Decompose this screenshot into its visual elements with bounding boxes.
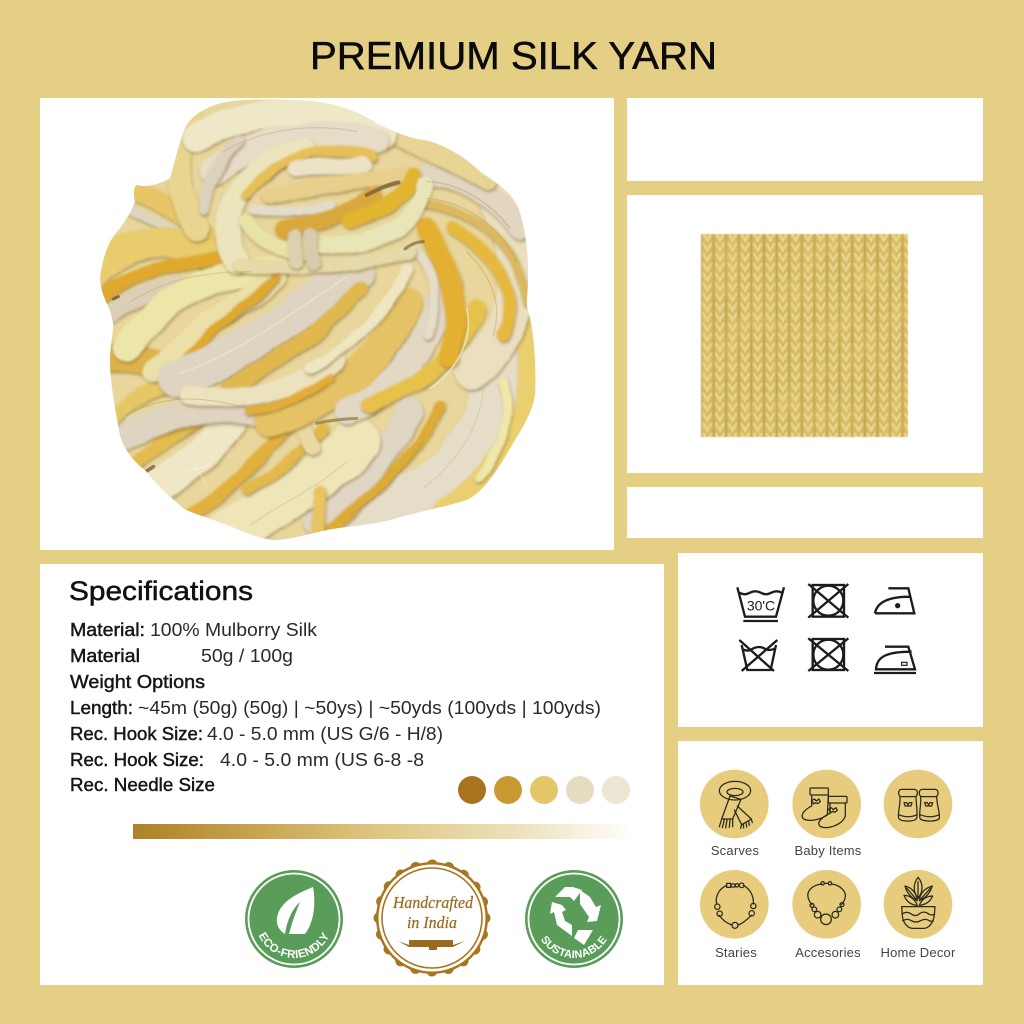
panel: yarn photo: [40, 95, 614, 550]
spec line: hook size second: [70, 750, 424, 770]
badge: sustainable: SUSTAINABLE: [542, 936, 607, 958]
icon: potted plant: [884, 870, 952, 939]
spec line: needle size: Rec. Needle Size: [70, 775, 215, 795]
badge: sustainable: [525, 870, 623, 968]
badge: handcrafted in india: Handcrafted: [392, 893, 473, 912]
icon: do not wash: [739, 640, 777, 671]
spec line: length: Length:: [70, 698, 133, 718]
badge: eco-friendly: [245, 870, 343, 968]
spec line: material weight: 50g / 100g: [201, 646, 293, 666]
panel: specifications: [40, 564, 704, 985]
image: knitted swatch: [701, 234, 908, 437]
icon: recycle arrows: [550, 887, 601, 945]
spec line: material weight: [70, 646, 293, 666]
panel: care symbols: [678, 553, 983, 727]
icon: baby shoes: [884, 770, 952, 838]
panel: knit swatch: [627, 195, 983, 473]
badge: handcrafted in india: in India: [407, 913, 457, 932]
icon: scarf: [700, 770, 769, 838]
icon: beaded necklace: [792, 870, 861, 939]
icon: necklace: [700, 870, 769, 939]
icon: leaf: [277, 887, 314, 934]
label: baby items: Baby Items: [794, 843, 862, 858]
gradient bar: [133, 824, 637, 839]
icon: baby booties: [792, 770, 861, 838]
label: scarves: Scarves: [711, 843, 759, 858]
badge: eco-friendly: ECO-FRIENDLY: [258, 932, 328, 958]
title: PREMIUM SILK YARN: [310, 35, 717, 78]
label: staries: Staries: [715, 945, 757, 960]
label: accesories: Accesories: [795, 945, 861, 960]
spec line: hook size: Rec. Hook Size:: [70, 724, 203, 744]
colour swatches: [458, 776, 630, 804]
badge: handcrafted in india: [376, 862, 488, 974]
spec line: material: Material:: [70, 620, 145, 640]
spec line: hook size second: Rec. Hook Size:: [70, 750, 204, 770]
image: silk yarn skein: [90, 95, 557, 548]
icon: do not tumble dry: [808, 584, 848, 618]
spec line: material weight: Material: [70, 646, 140, 666]
spec line: material: [70, 620, 318, 640]
panel: top right blank: [627, 98, 983, 181]
label: home decor: Home Decor: [881, 945, 956, 960]
panel: uses: [678, 741, 983, 985]
spec line: length: ~45m (50g) (50g) | ~50ys) | ~50yds (100yds | 100yds): [138, 698, 601, 718]
icon: iron: [874, 647, 916, 673]
icon: wash at 30C: [737, 587, 784, 621]
spec line: hook size: 4.0 - 5.0 mm (US G/6 - H/8): [207, 724, 443, 744]
spec line: hook size: [70, 724, 443, 744]
icon: iron low: [875, 588, 914, 613]
icon: wash at 30C: 30'C: [747, 598, 775, 614]
spec line: hook size second: 4.0 - 5.0 mm (US 6-8 -8: [220, 750, 424, 770]
heading: specifications: Specifications: [69, 576, 253, 606]
panel: blank strip: [627, 487, 983, 538]
spec line: weight options: Weight Options: [70, 672, 205, 692]
spec line: material: 100% Mulborry Silk: [150, 620, 318, 640]
icon: do not dry: [808, 638, 848, 671]
